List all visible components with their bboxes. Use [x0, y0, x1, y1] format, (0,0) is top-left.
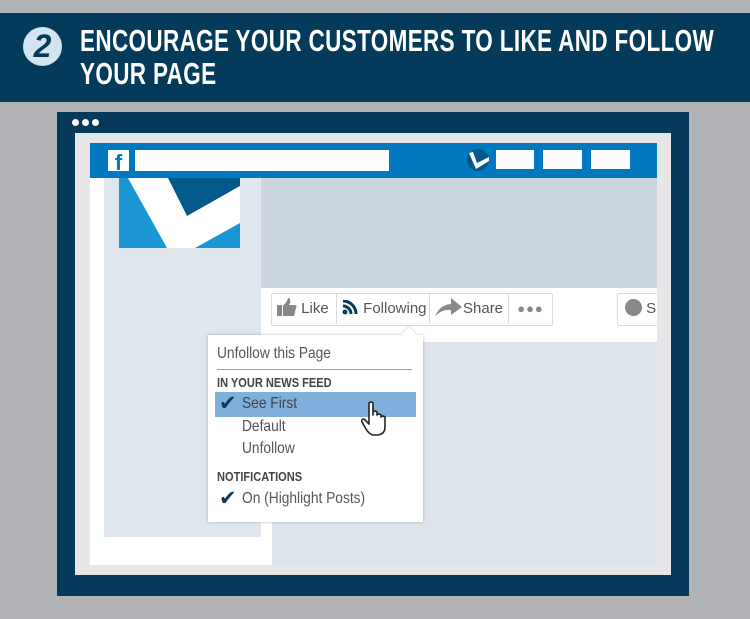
share button [430, 294, 509, 324]
browser viewport [75, 133, 671, 575]
title [80, 23, 714, 91]
like button [272, 294, 337, 324]
step number badge [23, 27, 62, 66]
browser frame [57, 112, 689, 596]
on highlight posts: On (Highlight Posts) [242, 490, 365, 507]
unfollow page option: Unfollow this Page [217, 345, 331, 362]
nav buttons [496, 150, 630, 169]
messenger button: S [646, 300, 656, 317]
title: ENCOURAGE YOUR CUSTOMERS TO LIKE AND FOLLOW [80, 23, 714, 58]
title: YOUR PAGE [80, 56, 216, 91]
highlighted see first: ✔ [219, 392, 237, 415]
highlighted see first: See First [242, 395, 297, 412]
facebook page [90, 143, 657, 565]
following button [337, 294, 430, 324]
unfollow option: Unfollow [242, 440, 295, 457]
cover photo [261, 178, 657, 288]
header banner [0, 13, 750, 102]
profile picture [119, 178, 240, 248]
share button: Share [463, 300, 503, 317]
default option: Default [242, 418, 286, 435]
fb logo [108, 150, 129, 171]
avatar icon [467, 149, 489, 171]
dropdown pointer [402, 327, 416, 341]
action buttons [271, 293, 553, 326]
content area [272, 342, 657, 565]
on highlight posts [219, 487, 365, 510]
highlighted see first [215, 392, 416, 417]
on highlight posts: ✔ [219, 487, 237, 510]
following button: Following [363, 300, 427, 317]
more button: ●●● [517, 301, 544, 316]
search bar [135, 150, 389, 171]
icon: hand cursor [360, 401, 386, 436]
left sidebar [104, 178, 261, 537]
notifications heading: NOTIFICATIONS [217, 469, 302, 484]
news feed heading: IN YOUR NEWS FEED [217, 375, 332, 390]
messenger button [617, 293, 667, 326]
top nav bar [90, 143, 657, 178]
step number badge: 2 [34, 28, 51, 64]
dropdown menu [208, 335, 423, 522]
browser dots [72, 119, 99, 126]
like button: Like [301, 300, 329, 317]
